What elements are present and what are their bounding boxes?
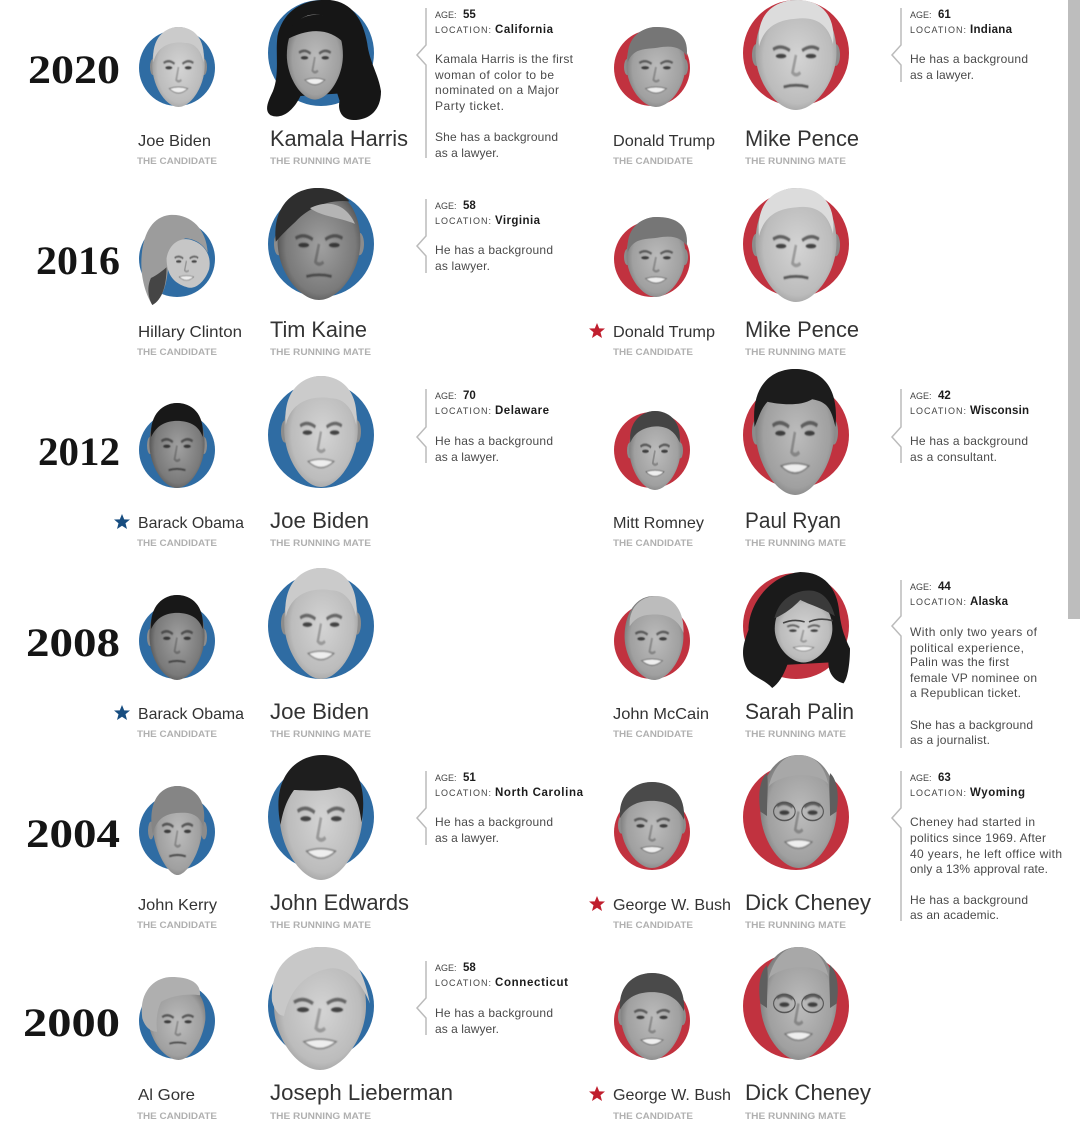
side bar [1068,0,1080,619]
callout: Paul Ryan: 42 [938,390,951,402]
callout: Tim Kaine: He has a background [435,243,553,257]
callout: Joe Biden [417,389,553,464]
callout: Joe Biden: AGE: [435,391,457,401]
callout: Paul Ryan [892,389,1029,464]
callout: Kamala Harris: as a lawyer. [435,146,499,160]
name: Mike Pence: THE RUNNING MATE [745,156,846,166]
callout: Tim Kaine [417,199,553,273]
callout: Dick Cheney: LOCATION: [910,788,966,798]
portrait: Donald Trump [614,27,690,107]
name: Kamala Harris [270,126,408,166]
callout: Joseph Lieberman: 58 [463,962,476,974]
portrait: Mitt Romney [614,411,690,490]
callout: Joe Biden: He has a background [435,434,553,448]
name: Kamala Harris: THE RUNNING MATE [270,156,371,166]
name: John McCain [613,706,709,739]
callout: Mike Pence [892,8,1028,82]
name: George W. Bush: George W. Bush [613,897,731,914]
portrait: George W. Bush [614,782,690,870]
callout: John Edwards: AGE: [435,773,457,783]
callout: Joseph Lieberman: AGE: [435,963,457,973]
year 2012: 2012 [38,429,120,474]
name: Tim Kaine: THE RUNNING MATE [270,347,371,357]
row: 2012 [38,369,1029,548]
name: John Edwards: THE RUNNING MATE [270,920,371,930]
callout: Kamala Harris: Party ticket. [435,99,504,113]
name: Sarah Palin [745,699,854,739]
winner star [589,1086,605,1101]
callout: Joe Biden: Delaware [495,405,549,417]
portrait: John McCain [614,596,690,680]
callout: Mike Pence: He has a background [910,52,1028,66]
callout: Sarah Palin: as a journalist. [910,733,990,747]
portrait: Mike Pence [743,0,849,110]
portrait: Dick Cheney [743,947,849,1060]
name: John McCain: John McCain [613,706,709,723]
name: John McCain: THE CANDIDATE [613,729,693,739]
callout: Sarah Palin: 44 [938,581,951,593]
name: Donald Trump [613,324,715,357]
name: Tim Kaine: Tim Kaine [270,317,367,342]
callout: Dick Cheney: AGE: [910,773,932,783]
callout: John Edwards: as a lawyer. [435,831,499,845]
name: Hillary Clinton: THE CANDIDATE [137,347,217,357]
name: Donald Trump: THE CANDIDATE [613,347,693,357]
callout: Kamala Harris: Kamala Harris is the first [435,52,574,66]
name: Joe Biden: THE RUNNING MATE [270,538,371,548]
name: Al Gore: Al Gore [138,1087,195,1104]
name: Dick Cheney: THE RUNNING MATE [745,920,846,930]
name: Paul Ryan: Paul Ryan [745,508,841,533]
portrait: Hillary Clinton [139,215,215,305]
name: John Edwards: John Edwards [270,890,409,915]
callout: Dick Cheney: politics since 1969. After [910,831,1046,845]
name: Mitt Romney: Mitt Romney [613,515,704,532]
callout: Dick Cheney [892,771,1062,922]
portrait: Joe Biden [268,376,374,488]
row: 2020 [28,0,1028,166]
name: George W. Bush [613,897,731,930]
year 2008: 2008 [26,620,120,665]
callout: Dick Cheney: as an academic. [910,908,999,922]
callout: Mike Pence: Indiana [970,24,1013,36]
name: Barack Obama [137,706,244,739]
name: Mike Pence: THE RUNNING MATE [745,347,846,357]
portrait: Joe Biden [139,27,215,107]
name: Barack Obama: THE CANDIDATE [137,729,217,739]
callout: Kamala Harris: She has a background [435,130,558,144]
callout: Mike Pence: 61 [938,9,951,21]
callout: Paul Ryan: Wisconsin [970,405,1029,417]
callout: Kamala Harris: AGE: [435,10,457,20]
name: Joe Biden: Joe Biden [138,133,211,150]
name: Donald Trump: Donald Trump [613,133,715,150]
name: Joe Biden: Joe Biden [270,508,369,533]
callout: Sarah Palin: AGE: [910,582,932,592]
name: Tim Kaine [270,317,371,357]
callout: John Edwards [417,771,584,845]
name: John Edwards [270,890,409,930]
name: George W. Bush [613,1087,731,1121]
name: Sarah Palin: Sarah Palin [745,699,854,724]
callout: Sarah Palin: political experience, [910,641,1024,655]
name: Kamala Harris: Kamala Harris [270,126,408,151]
callout: Sarah Palin: With only two years of [910,625,1038,639]
name: Barack Obama [137,515,244,548]
name: Mike Pence: Mike Pence [745,317,859,342]
portrait: Kamala Harris [267,0,381,120]
callout: Tim Kaine: 58 [463,200,476,212]
callout: Sarah Palin: She has a background [910,718,1033,732]
callout: Kamala Harris: California [495,24,554,36]
name: Joseph Lieberman: THE RUNNING MATE [270,1111,371,1121]
callout: Dick Cheney: He has a background [910,893,1028,907]
callout: Kamala Harris: woman of color to be [434,68,554,82]
callout: Kamala Harris: nominated on a Major [435,83,559,97]
portrait: Paul Ryan [743,369,849,495]
callout: Joseph Lieberman: Connecticut [495,977,568,989]
name: Dick Cheney: THE RUNNING MATE [745,1111,846,1121]
name: Joseph Lieberman [270,1080,453,1121]
year 2020: 2020 [28,47,120,92]
name: Dick Cheney: Dick Cheney [745,890,871,915]
portrait: Barack Obama [139,403,215,488]
name: Joseph Lieberman: Joseph Lieberman [270,1080,453,1105]
callout: Tim Kaine: LOCATION: [435,216,491,226]
portrait: John Edwards [268,755,374,880]
name: Hillary Clinton [137,324,242,357]
callout: Joseph Lieberman: He has a background [435,1006,553,1020]
name: Barack Obama: Barack Obama [138,706,244,723]
year 2004: 2004 [26,811,120,856]
portrait: Dick Cheney [743,755,849,870]
callout: Paul Ryan: LOCATION: [910,406,966,416]
winner star [589,323,605,338]
callout: Dick Cheney: Wyoming [970,787,1025,799]
name: Mike Pence [745,126,859,166]
callout: Dick Cheney: 63 [938,772,951,784]
callout: Mike Pence: AGE: [910,10,932,20]
callout: Sarah Palin: Alaska [970,596,1009,608]
callout: Dick Cheney: only a 13% approval rate. [910,862,1048,876]
name: Mike Pence [745,317,859,357]
name: Barack Obama: THE CANDIDATE [137,538,217,548]
name: George W. Bush: George W. Bush [613,1087,731,1104]
callout: Dick Cheney: Cheney had started in [910,815,1035,829]
name: Joe Biden: Joe Biden [270,699,369,724]
name: Dick Cheney: Dick Cheney [745,1080,871,1105]
name: Donald Trump [613,133,715,166]
portrait: Joseph Lieberman [268,947,374,1070]
name: Joe Biden [270,508,371,548]
name: John Kerry: John Kerry [138,897,217,914]
callout: John Edwards: LOCATION: [435,788,491,798]
name: Mitt Romney: THE CANDIDATE [613,538,693,548]
callout: Sarah Palin: LOCATION: [910,597,966,607]
portrait: George W. Bush [614,973,690,1060]
callout: John Edwards: 51 [463,772,476,784]
callout: Sarah Palin: Palin was the first [910,655,1010,669]
name: George W. Bush: THE CANDIDATE [613,1111,693,1121]
name: Paul Ryan [745,508,846,548]
name: Hillary Clinton: Hillary Clinton [138,324,242,341]
callout: John Edwards: North Carolina [495,787,584,799]
name: Dick Cheney [745,1080,871,1121]
name: Joe Biden: THE CANDIDATE [137,156,217,166]
name: Donald Trump: THE CANDIDATE [613,156,693,166]
callout: Tim Kaine: Virginia [495,215,541,227]
name: Joe Biden [137,133,217,166]
callout: Paul Ryan: He has a background [910,434,1028,448]
name: Barack Obama: Barack Obama [138,515,244,532]
portrait: Donald Trump [614,217,690,297]
portrait: Sarah Palin [743,572,850,688]
name: George W. Bush: THE CANDIDATE [613,920,693,930]
callout: John Edwards: He has a background [435,815,553,829]
callout: Kamala Harris: LOCATION: [435,25,491,35]
callout: Tim Kaine: as lawyer. [435,259,490,273]
callout: Joseph Lieberman [417,961,568,1036]
row: 2008 [26,568,1038,748]
callout: Tim Kaine: AGE: [435,201,457,211]
callout: Paul Ryan: as a consultant. [910,450,997,464]
callout: Dick Cheney: 40 years, he left office with [910,847,1062,861]
callout: Sarah Palin: a Republican ticket. [910,686,1021,700]
name: Al Gore: THE CANDIDATE [137,1111,217,1121]
winner star [114,514,130,529]
portrait: Barack Obama [139,595,215,680]
callout: Sarah Palin [892,580,1038,748]
callout: Kamala Harris: 55 [463,9,476,21]
row: 2004 [26,755,1062,930]
row: 2000 [23,947,871,1121]
name: John Kerry [137,897,217,930]
winner star [589,896,605,911]
callout: Mike Pence: as a lawyer. [910,68,974,82]
year 2000: 2000 [23,1000,120,1045]
portrait: Al Gore [139,977,215,1060]
callout: Joe Biden: as a lawyer. [435,450,499,464]
callout: Mike Pence: LOCATION: [910,25,966,35]
name: Mike Pence: Mike Pence [745,126,859,151]
name: Al Gore [137,1087,217,1121]
name: Joe Biden: THE RUNNING MATE [270,729,371,739]
name: John Kerry: THE CANDIDATE [137,920,217,930]
callout: Joseph Lieberman: as a lawyer. [435,1022,499,1036]
portrait: Joe Biden [268,568,374,679]
portrait: Mike Pence [743,188,849,302]
year 2016: 2016 [36,238,120,283]
callout: Kamala Harris [417,8,574,160]
callout: Joe Biden: 70 [463,390,476,402]
name: Paul Ryan: THE RUNNING MATE [745,538,846,548]
name: Joe Biden [270,699,371,739]
callout: Joseph Lieberman: LOCATION: [435,978,491,988]
portrait: Tim Kaine [268,188,374,300]
winner star [114,705,130,720]
portrait: John Kerry [139,786,215,875]
name: Sarah Palin: THE RUNNING MATE [745,729,846,739]
row: 2016 [36,188,859,357]
callout: Paul Ryan: AGE: [910,391,932,401]
callout: Sarah Palin: female VP nominee on [910,671,1037,685]
name: Mitt Romney [613,515,704,548]
callout: Joe Biden: LOCATION: [435,406,491,416]
name: Dick Cheney [745,890,871,930]
name: Donald Trump: Donald Trump [613,324,715,341]
